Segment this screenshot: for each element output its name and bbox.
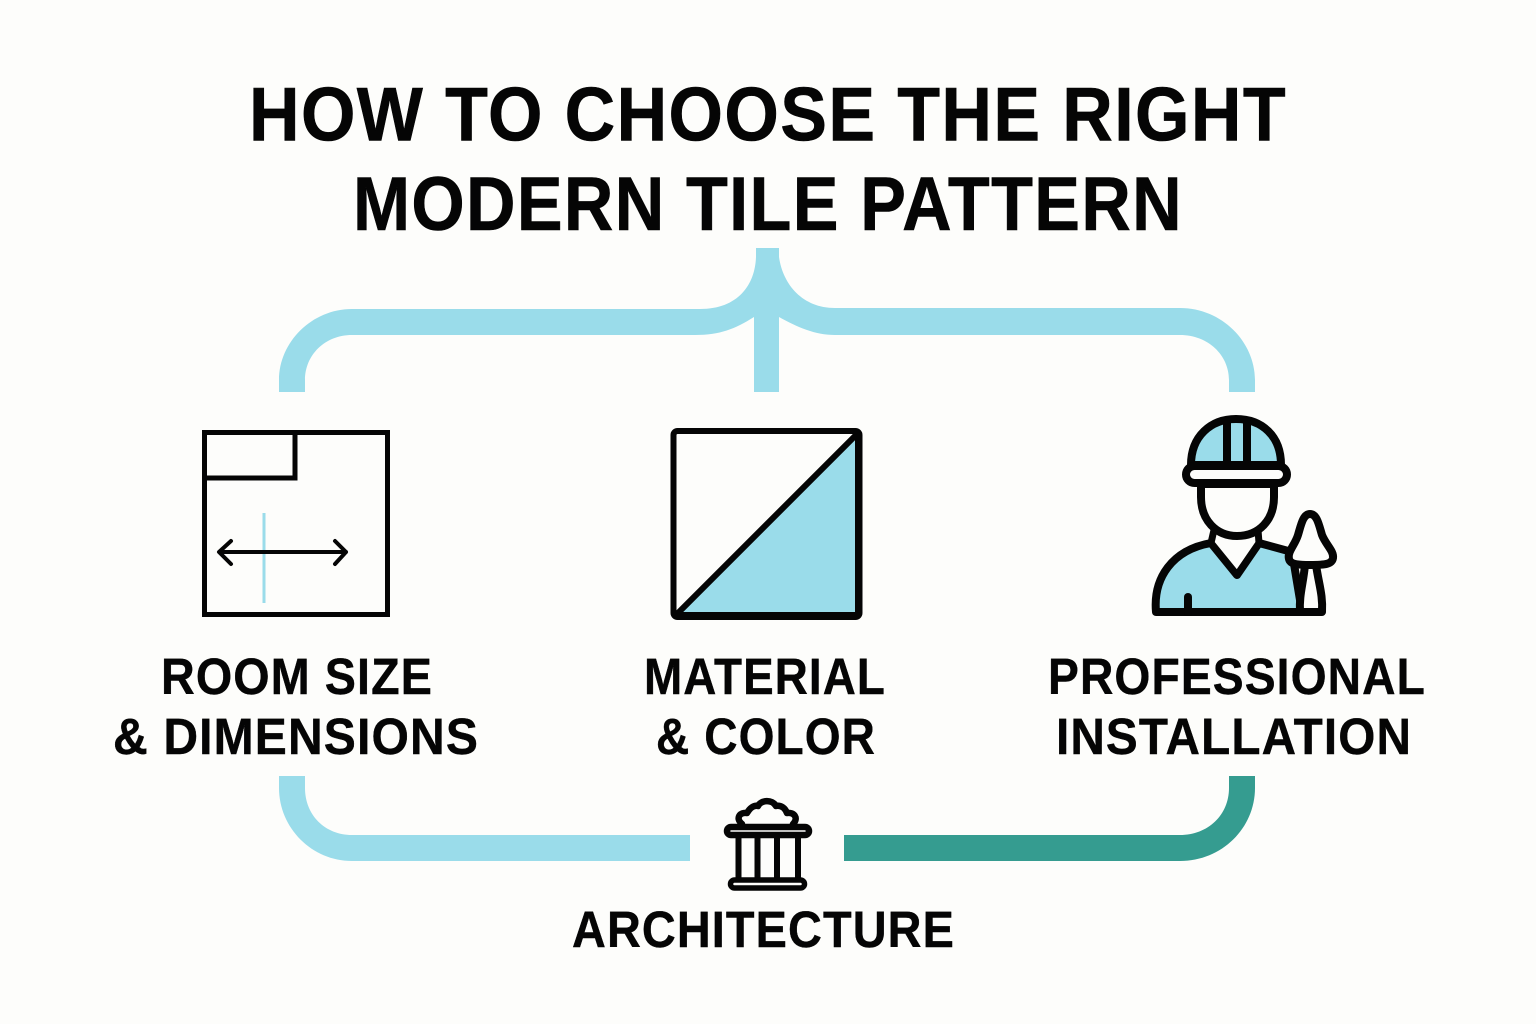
icon: diagonal tile (674, 431, 860, 617)
worker collar (1211, 530, 1259, 575)
bottom left connector (279, 776, 690, 861)
label: installation: PROFESSIONAL (1048, 648, 1426, 705)
title: HOW TO CHOOSE THE RIGHT (249, 72, 1287, 158)
top connector bracket (279, 248, 1255, 392)
trowel blade (1289, 514, 1333, 565)
title (249, 72, 1287, 247)
label: material: MATERIAL (644, 648, 886, 705)
label: room size: ROOM SIZE (161, 648, 433, 705)
title: MODERN TILE PATTERN (353, 162, 1183, 247)
label: room size: & DIMENSIONS (113, 708, 479, 765)
label: architecture: ARCHITECTURE (572, 901, 955, 958)
label: installation: INSTALLATION (1056, 708, 1412, 765)
body seam (1184, 597, 1192, 612)
icon: room floor plan (204, 432, 388, 614)
label: room size (113, 648, 479, 765)
icon: architecture column building (727, 801, 809, 888)
label: material (644, 648, 886, 765)
bottom right connector (844, 776, 1255, 861)
helmet dome (1191, 419, 1281, 465)
worker body (1156, 543, 1302, 612)
worker face (1201, 484, 1274, 536)
helmet brim (1186, 466, 1287, 483)
label: material: & COLOR (656, 708, 876, 765)
label: installation (1048, 648, 1426, 765)
trowel handle (1300, 565, 1322, 612)
icon: construction worker with trowel (1156, 419, 1333, 612)
helmet ribs (1227, 421, 1247, 463)
